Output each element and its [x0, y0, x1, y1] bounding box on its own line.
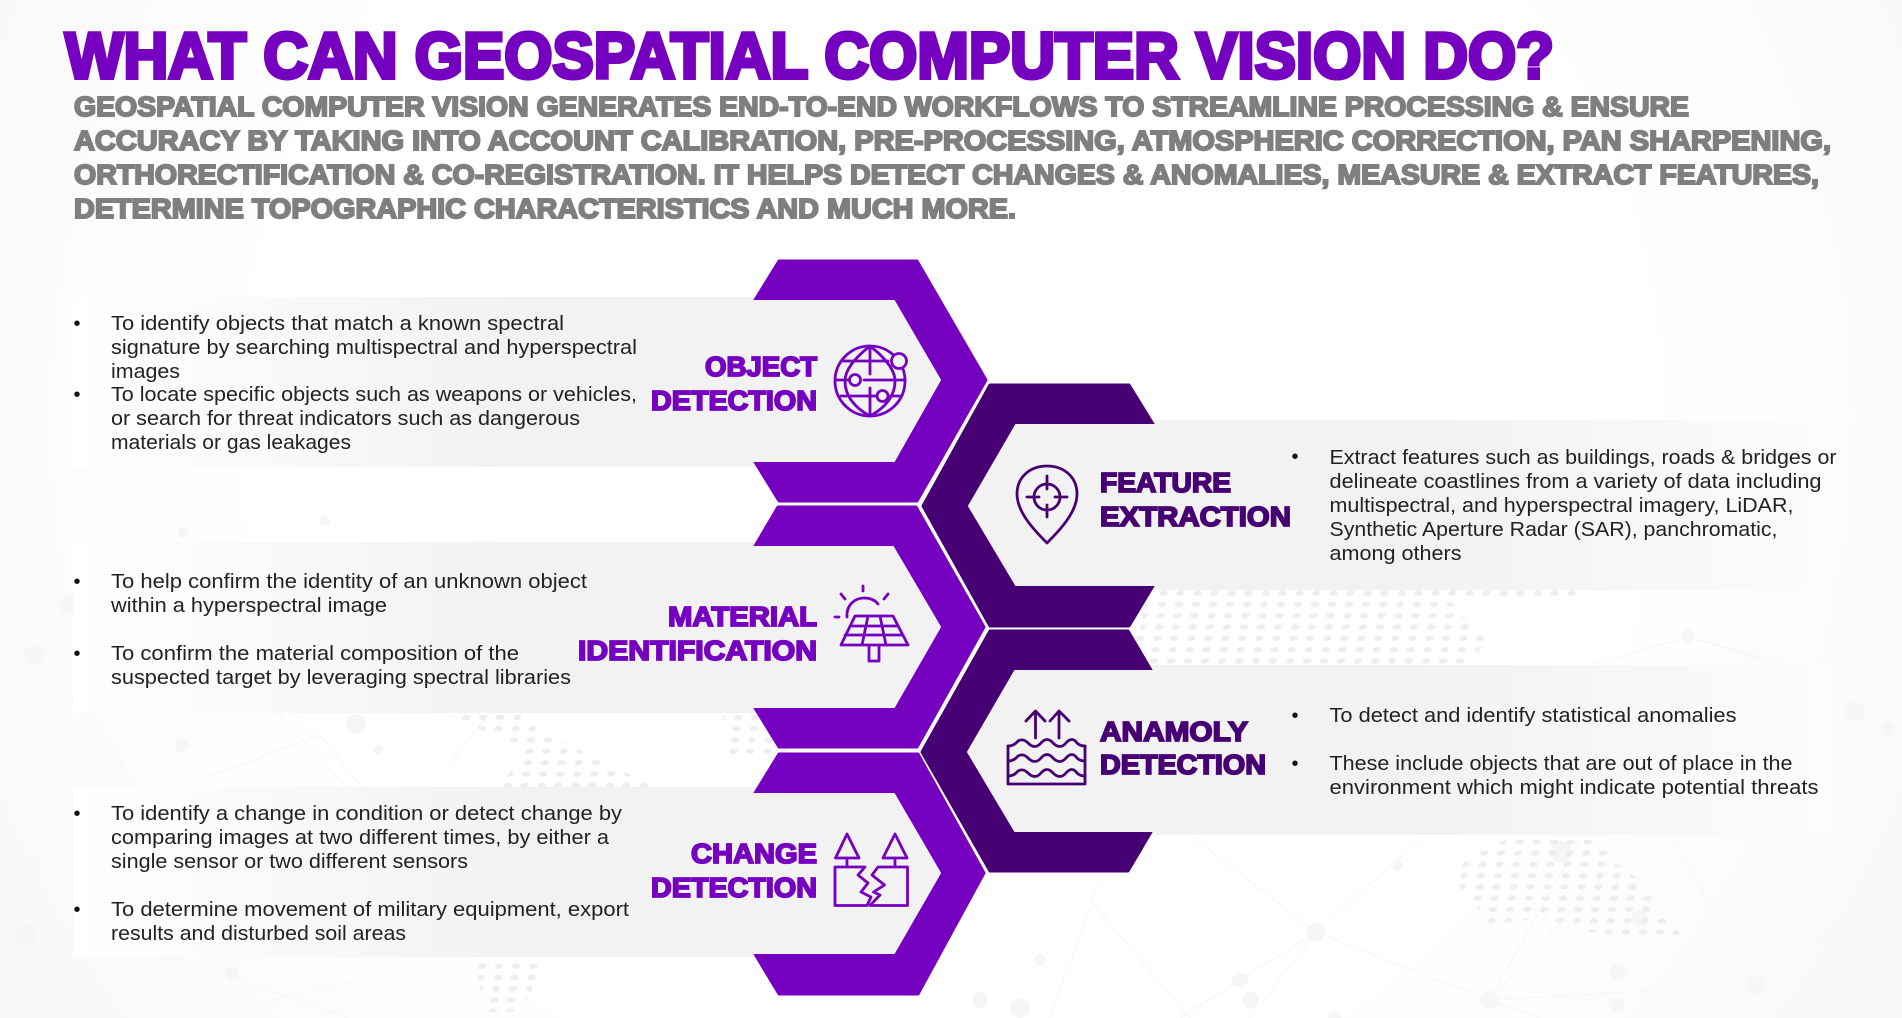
text: anomaly detection bullets: To detect and identify statistical anomalies: [1330, 704, 1736, 727]
text: anomaly detection bullets: environment which might indicate potential threats: [1330, 776, 1818, 799]
heading: object detection: DETECTION: [651, 385, 817, 416]
text: anomaly detection bullets: •: [1291, 705, 1299, 727]
text: change detection bullets: •: [73, 899, 81, 921]
text: change detection bullets: comparing images at two different times, by either a: [111, 826, 610, 849]
icon: water waves with arrows: [1008, 711, 1085, 784]
heading: change detection: CHANGE: [691, 838, 817, 869]
text: material identification bullets: within a hyperspectral image: [110, 594, 387, 617]
text: object detection bullets: •: [73, 313, 81, 335]
text: material identification bullets: •: [73, 571, 81, 593]
text: material identification bullets: To confirm the material composition of the: [111, 642, 519, 665]
heading: object detection: [651, 351, 817, 416]
text: object detection bullets: signature by searching multispectral and hyperspectral: [111, 336, 637, 359]
text: object detection bullets: •: [73, 384, 81, 406]
heading: change detection: [651, 838, 817, 903]
icon: cracked ground and trees: [835, 834, 908, 906]
text: object detection bullets: To identify objects that match a known spectral: [111, 312, 564, 335]
text: anomaly detection bullets: [1291, 704, 1818, 799]
heading: material identification: MATERIAL: [668, 601, 817, 632]
text: change detection bullets: [73, 802, 629, 945]
subtitle paragraph: DETERMINE TOPOGRAPHIC CHARACTERISTICS AND MUCH MORE.: [74, 193, 1016, 224]
heading: feature extraction: FEATURE: [1100, 467, 1231, 498]
heading: anomaly detection: ANAMOLY: [1100, 716, 1248, 747]
heading: feature extraction: [1100, 467, 1291, 532]
text: change detection bullets: To determine movement of military equipment, export: [111, 898, 629, 921]
heading: change detection: DETECTION: [651, 872, 817, 903]
text: anomaly detection bullets: •: [1291, 753, 1299, 775]
text: change detection bullets: single sensor or two different sensors: [111, 850, 468, 873]
text: object detection bullets: or search for threat indicators such as dangerous: [111, 407, 580, 430]
subtitle paragraph: ACCURACY BY TAKING INTO ACCOUNT CALIBRATION, PRE-PROCESSING, ATMOSPHERIC CORRECTION, PAN SHARPENING,: [74, 125, 1831, 156]
text: material identification bullets: [73, 570, 587, 689]
icon: solar panel and sun: [835, 586, 908, 661]
text: object detection bullets: [73, 312, 637, 454]
text: feature extraction bullet: multispectral, and hyperspectral imagery, LiDAR,: [1330, 494, 1794, 517]
panel: anomaly detection: [922, 631, 1834, 871]
panel: feature extraction: [923, 385, 1837, 626]
heading: anomaly detection: DETECTION: [1100, 749, 1266, 780]
subtitle paragraph: [74, 91, 1831, 224]
icon: globe with nodes: [835, 346, 906, 416]
text: object detection bullets: To locate specific objects such as weapons or vehicles,: [111, 383, 637, 406]
text: change detection bullets: To identify a change in condition or detect change by: [111, 802, 623, 825]
heading: anomaly detection: [1100, 716, 1266, 780]
text: feature extraction bullet: among others: [1330, 542, 1462, 565]
heading: material identification: IDENTIFICATION: [578, 635, 817, 666]
title: WHAT CAN GEOSPATIAL COMPUTER VISION DO?: [65, 19, 1554, 92]
panel: material identification: [73, 507, 984, 747]
text: material identification bullets: To help confirm the identity of an unknown object: [111, 570, 587, 593]
text: feature extraction bullet: delineate coastlines from a variety of data including: [1330, 470, 1822, 493]
text: feature extraction bullet: •: [1291, 446, 1299, 468]
heading: feature extraction: EXTRACTION: [1100, 501, 1291, 532]
text: object detection bullets: images: [111, 360, 180, 383]
text: feature extraction bullet: Synthetic Aperture Radar (SAR), panchromatic,: [1330, 518, 1778, 541]
text: object detection bullets: materials or gas leakages: [111, 431, 351, 454]
text: feature extraction bullet: [1291, 446, 1837, 565]
text: material identification bullets: suspected target by leveraging spectral libraries: [111, 666, 571, 689]
heading: material identification: [578, 601, 817, 666]
heading: object detection: OBJECT: [705, 351, 817, 382]
text: change detection bullets: results and disturbed soil areas: [111, 922, 406, 945]
text: feature extraction bullet: Extract features such as buildings, roads & bridges or: [1330, 446, 1837, 469]
subtitle paragraph: ORTHORECTIFICATION & CO-REGISTRATION. IT HELPS DETECT CHANGES & ANOMALIES, MEASURE & EXTRACT FEATURES,: [74, 159, 1819, 190]
panel: object detection: [73, 261, 986, 501]
icon: location pin with crosshair: [1017, 466, 1077, 543]
panel: change detection: [73, 754, 984, 994]
text: change detection bullets: •: [73, 803, 81, 825]
text: material identification bullets: •: [73, 643, 81, 665]
text: anomaly detection bullets: These include objects that are out of place in the: [1330, 752, 1792, 775]
subtitle paragraph: GEOSPATIAL COMPUTER VISION GENERATES END-TO-END WORKFLOWS TO STREAMLINE PROCESSING & ENSURE: [74, 91, 1689, 122]
